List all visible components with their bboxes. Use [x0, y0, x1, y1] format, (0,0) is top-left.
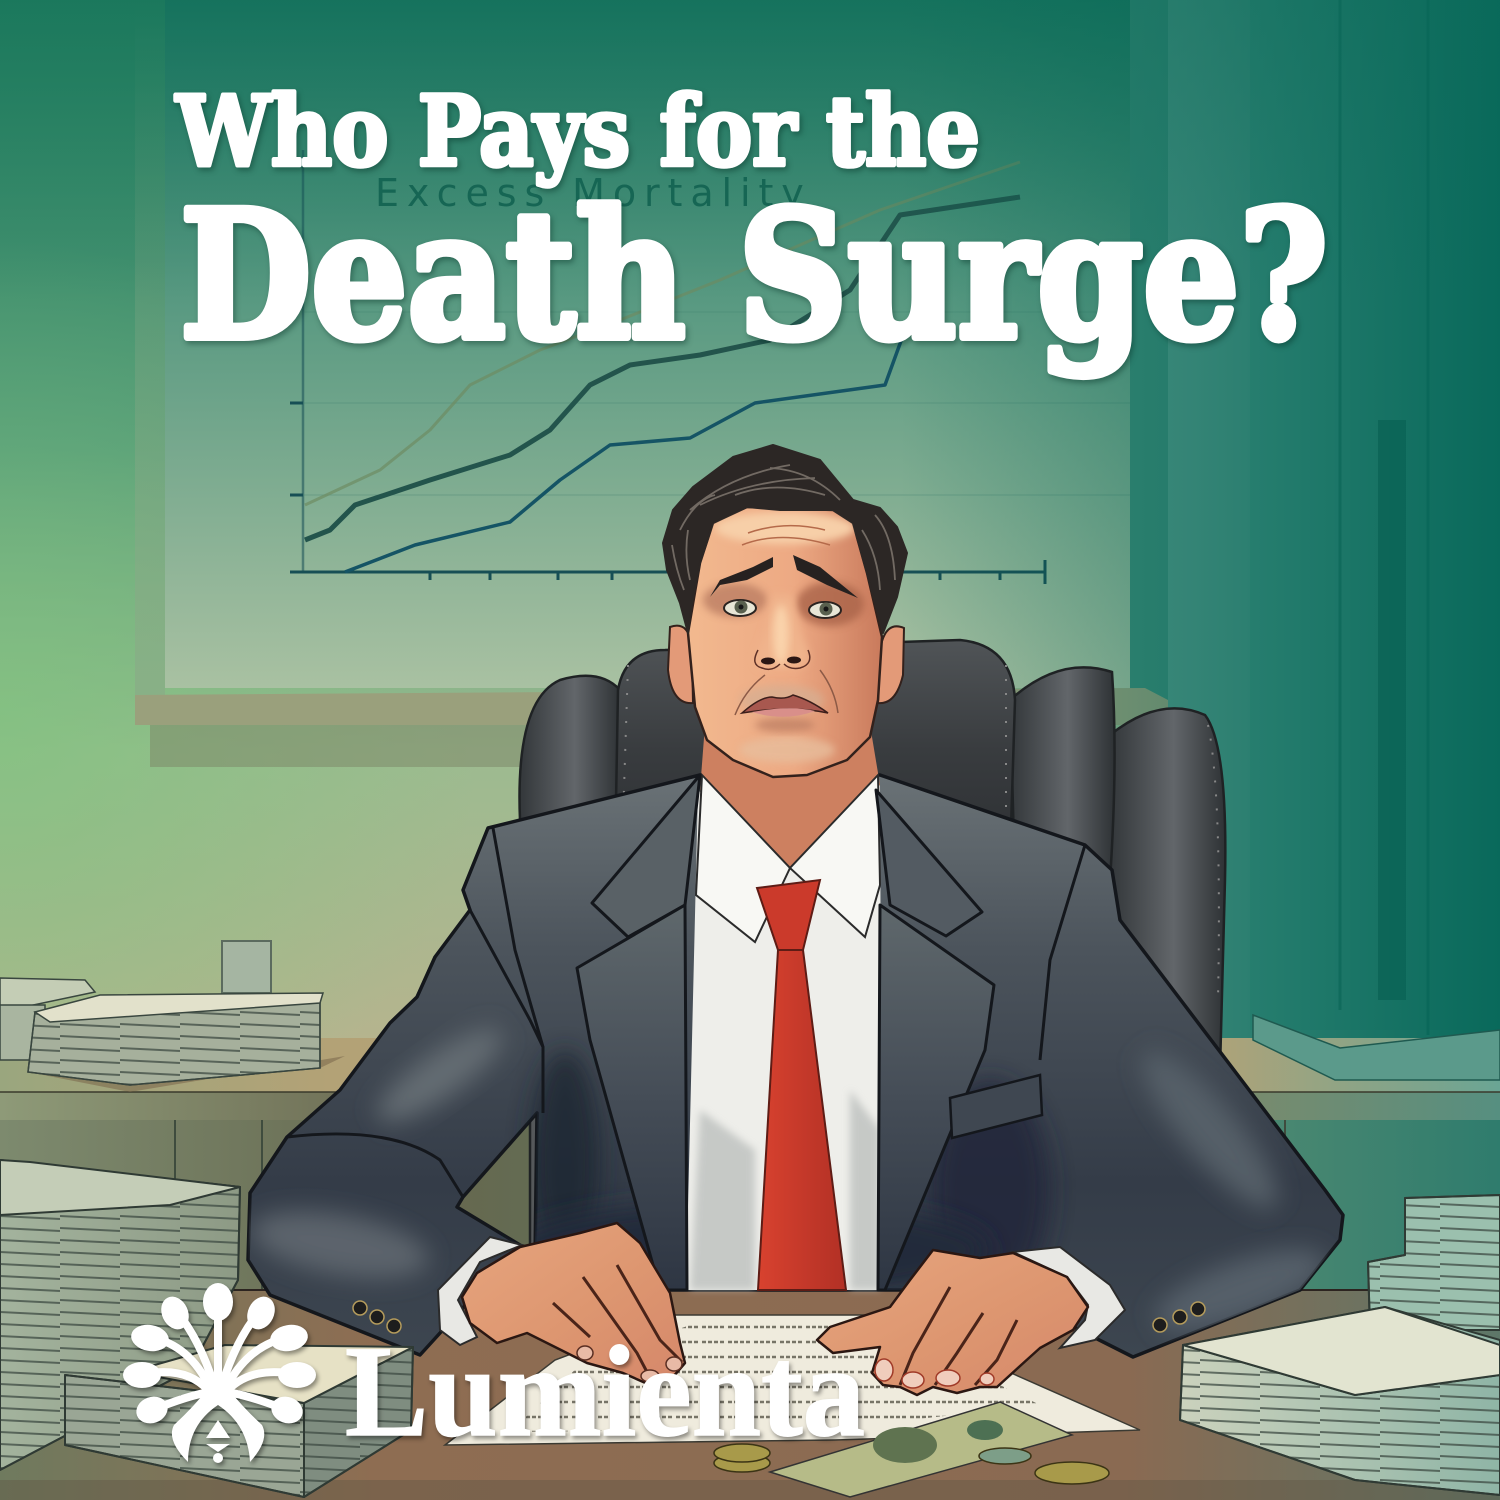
central document	[445, 1315, 1140, 1445]
eyes	[724, 600, 841, 618]
left sleeve buttons	[353, 1301, 401, 1333]
title line two: Death Surge?	[180, 172, 1328, 379]
colour overlay on the room	[0, 0, 1500, 1040]
title	[175, 75, 1328, 379]
forehead wrinkles	[742, 526, 830, 545]
lapels	[577, 775, 994, 1290]
face	[688, 507, 882, 777]
right hand	[817, 1250, 1088, 1395]
neck	[700, 725, 880, 872]
line chart	[290, 150, 1130, 584]
face shading	[703, 512, 864, 763]
finger gaps	[900, 1287, 1017, 1385]
paper stacks right foreground	[1180, 1195, 1500, 1495]
fingernails	[875, 1359, 994, 1388]
jacket shading	[246, 828, 1334, 1347]
nose	[755, 595, 810, 669]
man in suit	[246, 725, 1343, 1357]
right cuff	[1013, 1247, 1125, 1348]
office chair	[520, 640, 1225, 1250]
whiteboard with chart	[135, 0, 1168, 767]
small box	[222, 941, 271, 993]
front desk	[0, 1290, 1500, 1500]
tie	[757, 880, 846, 1290]
shirt	[686, 785, 882, 1290]
jacket	[248, 775, 1343, 1357]
logo wordmark: Lumienta	[345, 1320, 865, 1464]
cabinet on the right	[1168, 0, 1500, 1040]
collar	[696, 775, 880, 942]
chart title: Excess Mortality	[375, 171, 807, 215]
ears	[668, 626, 904, 703]
title line one: Who Pays for the	[175, 75, 980, 188]
back paper stack left	[0, 978, 345, 1092]
logo mark	[123, 1283, 316, 1463]
hair highlights	[672, 465, 895, 590]
mouth	[742, 695, 828, 717]
brand logo	[123, 1283, 865, 1464]
hair	[663, 445, 907, 633]
money and coins	[714, 1402, 1109, 1497]
left cuff	[438, 1237, 522, 1345]
left hand	[462, 1223, 685, 1385]
eyebrows	[710, 555, 858, 598]
fingernails	[577, 1346, 682, 1382]
cabinet base	[1253, 1015, 1500, 1080]
right sleeve buttons	[1153, 1302, 1205, 1332]
finger gaps	[553, 1265, 682, 1372]
paper stacks left foreground	[0, 1160, 413, 1497]
head	[663, 445, 907, 777]
pocket	[950, 1075, 1042, 1138]
back desk and papers	[0, 941, 1500, 1300]
